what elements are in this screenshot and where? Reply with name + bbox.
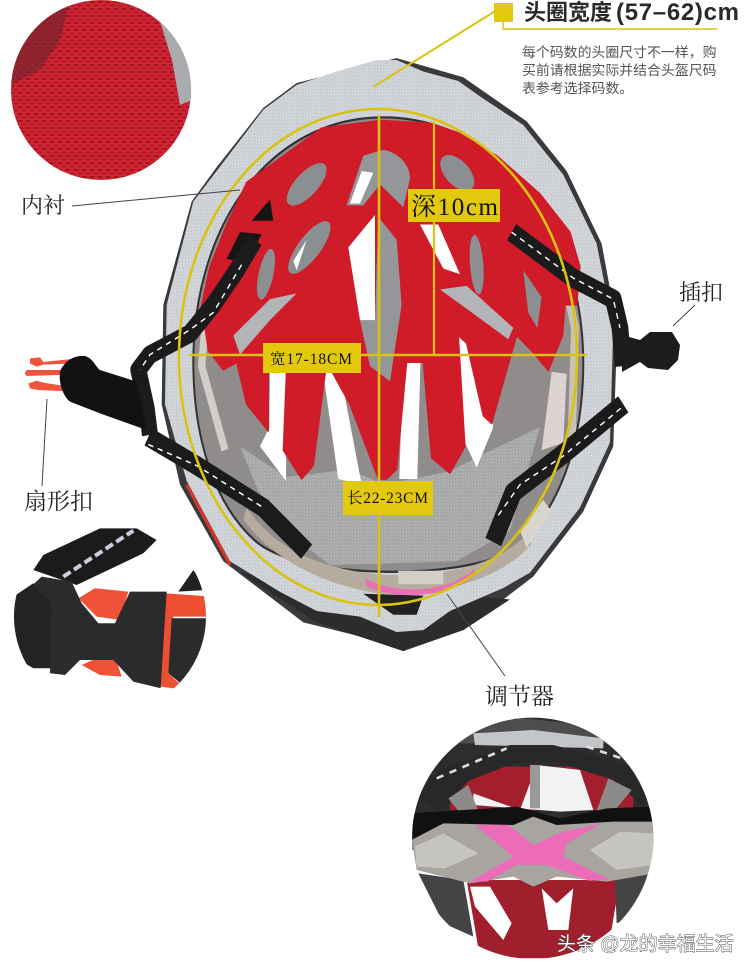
adjuster dial bbox=[398, 571, 443, 584]
buckle body bbox=[33, 577, 167, 688]
depth label: 深10cm bbox=[411, 193, 499, 221]
CE label bbox=[520, 500, 552, 548]
lower straps bbox=[418, 873, 650, 937]
width label: 宽17-18CM bbox=[270, 350, 352, 368]
foam corner bbox=[160, 22, 191, 105]
orange clip prongs bbox=[25, 357, 75, 391]
orange lower tip bbox=[82, 660, 122, 677]
dark fold in mesh bbox=[11, 6, 68, 84]
label: fan buckle: 扇形扣 bbox=[24, 489, 93, 514]
lower foam patch bbox=[240, 427, 540, 565]
inner side strip left bbox=[202, 286, 225, 450]
foam strip bbox=[473, 730, 603, 748]
label: side release buckle bbox=[673, 280, 723, 326]
central white vents bbox=[293, 171, 460, 320]
underline bbox=[503, 22, 717, 29]
foam shell bbox=[165, 60, 613, 632]
strap left stitch bbox=[140, 265, 242, 370]
pink cross bbox=[470, 823, 610, 882]
inside label bbox=[542, 372, 567, 450]
dark under dial bbox=[363, 594, 423, 615]
label: adjuster bbox=[447, 594, 554, 709]
strap upper right bbox=[512, 232, 623, 366]
yellow measuring ellipse bbox=[179, 109, 577, 605]
strap upper right stitch bbox=[512, 232, 620, 328]
strap lower left stitch bbox=[148, 445, 263, 508]
inner cavity bbox=[193, 117, 583, 572]
label: adjuster: 调节器 bbox=[485, 684, 554, 709]
liner vents bbox=[253, 148, 542, 328]
black band bbox=[412, 807, 655, 838]
strap left bbox=[138, 240, 255, 435]
foam diagonals bbox=[233, 286, 513, 355]
label: side release buckle: 插扣 bbox=[679, 280, 723, 305]
vent top right bbox=[435, 148, 480, 198]
upper red bbox=[450, 767, 633, 810]
length line bbox=[378, 115, 380, 617]
description: 每个码数的头圈尺寸不一样，购 bbox=[522, 44, 716, 60]
pink adjuster edge bbox=[365, 569, 475, 595]
depth line bbox=[433, 121, 435, 355]
right strap bbox=[168, 618, 206, 682]
top stitching bbox=[437, 747, 627, 778]
orange frame bbox=[160, 594, 206, 688]
panel: liner close-up circle bbox=[10, 0, 192, 182]
yellow marker square bbox=[494, 3, 513, 22]
lower white holes bbox=[470, 887, 573, 940]
white vents bbox=[260, 334, 493, 485]
left strap bbox=[13, 583, 55, 668]
grey gloss bbox=[530, 765, 540, 808]
length label: 长22-23CM bbox=[347, 489, 428, 507]
black tube bbox=[60, 356, 147, 430]
panel: buckle close-up circle bbox=[13, 528, 213, 690]
upper strap bbox=[33, 528, 157, 585]
width line bbox=[189, 354, 587, 356]
strap lower right bbox=[493, 404, 623, 542]
vent top left bbox=[281, 156, 332, 213]
adjuster light plates bbox=[415, 832, 653, 870]
strap lower left bbox=[148, 437, 307, 552]
dark base bbox=[410, 717, 657, 850]
central foam rib bbox=[347, 150, 410, 381]
grey adjuster body bbox=[412, 817, 655, 887]
label: liner bbox=[21, 190, 240, 218]
pointer line to helmet bbox=[373, 10, 497, 87]
vent far right bbox=[523, 270, 542, 328]
outer shell bbox=[162, 58, 617, 645]
description: 表参考选择码数。 bbox=[522, 80, 633, 96]
vent small left bbox=[253, 247, 279, 302]
heading: 头圈宽度 bbox=[524, 0, 612, 25]
rear strap fragment bbox=[178, 570, 202, 592]
orange upper tip bbox=[78, 588, 128, 620]
vent mid right bbox=[468, 234, 486, 295]
red liner bbox=[202, 120, 580, 479]
black strap top bbox=[418, 745, 648, 800]
vent mid left bbox=[282, 214, 337, 281]
fan buckle with tube bbox=[25, 356, 147, 430]
carbon rim bbox=[240, 573, 510, 651]
white gap bbox=[473, 765, 593, 812]
top carbon bbox=[458, 718, 608, 744]
icon: side buckle on helmet bbox=[622, 332, 680, 372]
length label bbox=[343, 481, 433, 515]
grey struts bbox=[448, 778, 632, 810]
label: liner: 内衬 bbox=[21, 193, 65, 218]
lower red and white bbox=[467, 880, 620, 958]
red trim on shell bbox=[187, 485, 230, 565]
inner side strip right bbox=[555, 232, 575, 443]
width label bbox=[263, 343, 361, 373]
watermark: 头条 @龙的幸福生活 bbox=[557, 933, 734, 955]
description: 买前请根据实际并结合头盔尺码 bbox=[522, 62, 717, 78]
header block bbox=[373, 0, 739, 96]
retention band bbox=[243, 508, 532, 594]
black openings bbox=[227, 200, 273, 263]
panel: adjuster close-up circle bbox=[410, 717, 657, 958]
strap stitching bbox=[63, 531, 133, 577]
strap lower right stitch bbox=[498, 406, 623, 515]
helmet photo bbox=[138, 58, 623, 651]
label: fan buckle bbox=[24, 399, 93, 514]
